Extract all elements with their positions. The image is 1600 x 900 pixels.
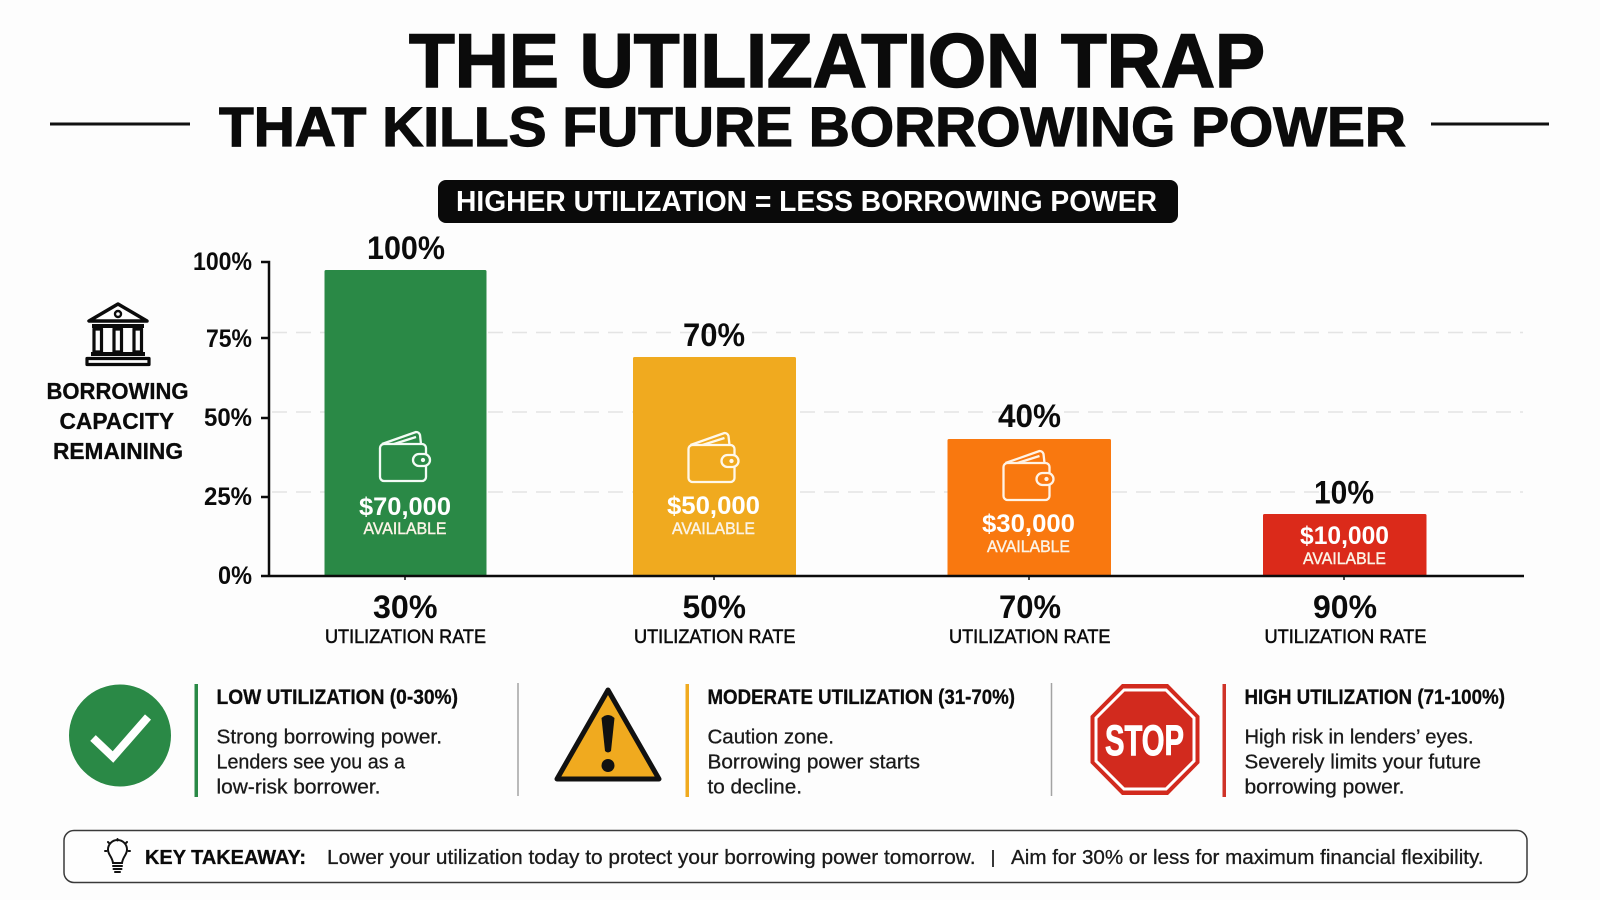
bar: 50% utilization: 70% [683,317,745,353]
bar: 70% utilization: AVAILABLE [987,538,1070,556]
panel: high utilization: HIGH UTILIZATION (71-100%) [1244,685,1505,709]
title: THAT KILLS FUTURE BORROWING POWER [219,95,1406,158]
panel: high utilization: High risk in lenders’ eyes. [1244,726,1474,748]
title: THE UTILIZATION TRAP [409,19,1265,104]
panel: low utilization: Lenders see you as a [216,750,406,774]
x-axis labels: UTILIZATION RATE [325,627,486,648]
panel: high utilization: borrowing power. [1244,776,1404,798]
y-axis gridlines [272,332,1523,492]
bar: 30% utilization: $70,000 [359,493,451,521]
icon: wallet [1004,451,1054,500]
bar: 30% utilization: 100% [367,230,445,266]
x-axis labels: UTILIZATION RATE [634,627,796,648]
y-axis labels: 25% [204,483,252,511]
icon: light bulb [105,839,130,872]
chart axes [261,262,1524,580]
icon: green check [69,684,171,786]
y-axis labels [193,248,252,590]
panel: high utilization [1090,684,1505,798]
x-axis labels: UTILIZATION RATE [949,627,1110,648]
y-axis labels: 100% [193,248,252,276]
y-axis title: borrowing capacity remaining: BORROWING [46,378,188,404]
callout: key takeaway [64,830,1527,882]
y-axis labels: 75% [206,325,252,353]
panel: moderate utilization: MODERATE UTILIZATION (31-70%) [708,685,1015,709]
callout: key takeaway: Aim for 30% or less for maximum financial flexibility. [1011,846,1484,869]
icon: stop sign [1090,684,1200,795]
icon: wallet [688,433,738,482]
bar: 50% utilization: $50,000 [667,492,760,520]
panel: low utilization: LOW UTILIZATION (0-30%) [216,685,458,709]
bar: 70% utilization: 40% [998,398,1061,434]
panel: moderate utilization: to decline. [708,776,802,798]
bar: 90% utilization: AVAILABLE [1303,550,1386,568]
title [50,19,1549,158]
panel: moderate utilization: Caution zone. [708,726,834,748]
callout: key takeaway: KEY TAKEAWAY: [145,846,306,869]
bar: 50% utilization: AVAILABLE [672,520,755,538]
panel: low utilization: Strong borrowing power. [216,726,442,748]
x-axis labels: UTILIZATION RATE [1264,627,1426,648]
icon: wallet [380,432,430,481]
panel: high utilization: Severely limits your future [1244,750,1481,774]
x-axis labels: 90% [1313,589,1377,625]
bar chart [193,230,1524,648]
bar: 30% utilization [324,230,486,576]
icon: stop sign: STOP [1105,717,1184,765]
bar: 70% utilization: $30,000 [982,510,1075,538]
panel: moderate utilization [557,684,1015,798]
bar: 90% utilization: $10,000 [1300,522,1389,550]
panel: low utilization [69,684,458,798]
x-axis labels: 70% [999,589,1061,625]
bar: 90% utilization: 10% [1314,474,1374,510]
x-axis labels [325,589,1426,648]
bar: 90% utilization [1263,474,1426,576]
y-axis title: borrowing capacity remaining: CAPACITY [60,408,174,434]
icon: bank [87,304,149,364]
bar: 30% utilization: AVAILABLE [364,520,446,538]
bar: 70% utilization [948,398,1111,576]
y-axis title: borrowing capacity remaining [46,304,188,464]
y-axis labels: 50% [204,404,252,432]
x-axis labels: 50% [682,589,746,625]
icon: warning triangle [557,690,659,779]
panel: low utilization: low-risk borrower. [216,776,380,798]
bar: 50% utilization [633,317,796,576]
y-axis title: borrowing capacity remaining: REMAINING [53,438,183,464]
subtitle banner: HIGHER UTILIZATION = LESS BORROWING POWER [456,186,1157,218]
callout: key takeaway: Lower your utilization today to protect your borrowing power tomorrow. [327,846,976,869]
y-axis labels: 0% [218,562,252,590]
panel: moderate utilization: Borrowing power starts [708,750,920,774]
x-axis labels: 30% [373,589,438,625]
